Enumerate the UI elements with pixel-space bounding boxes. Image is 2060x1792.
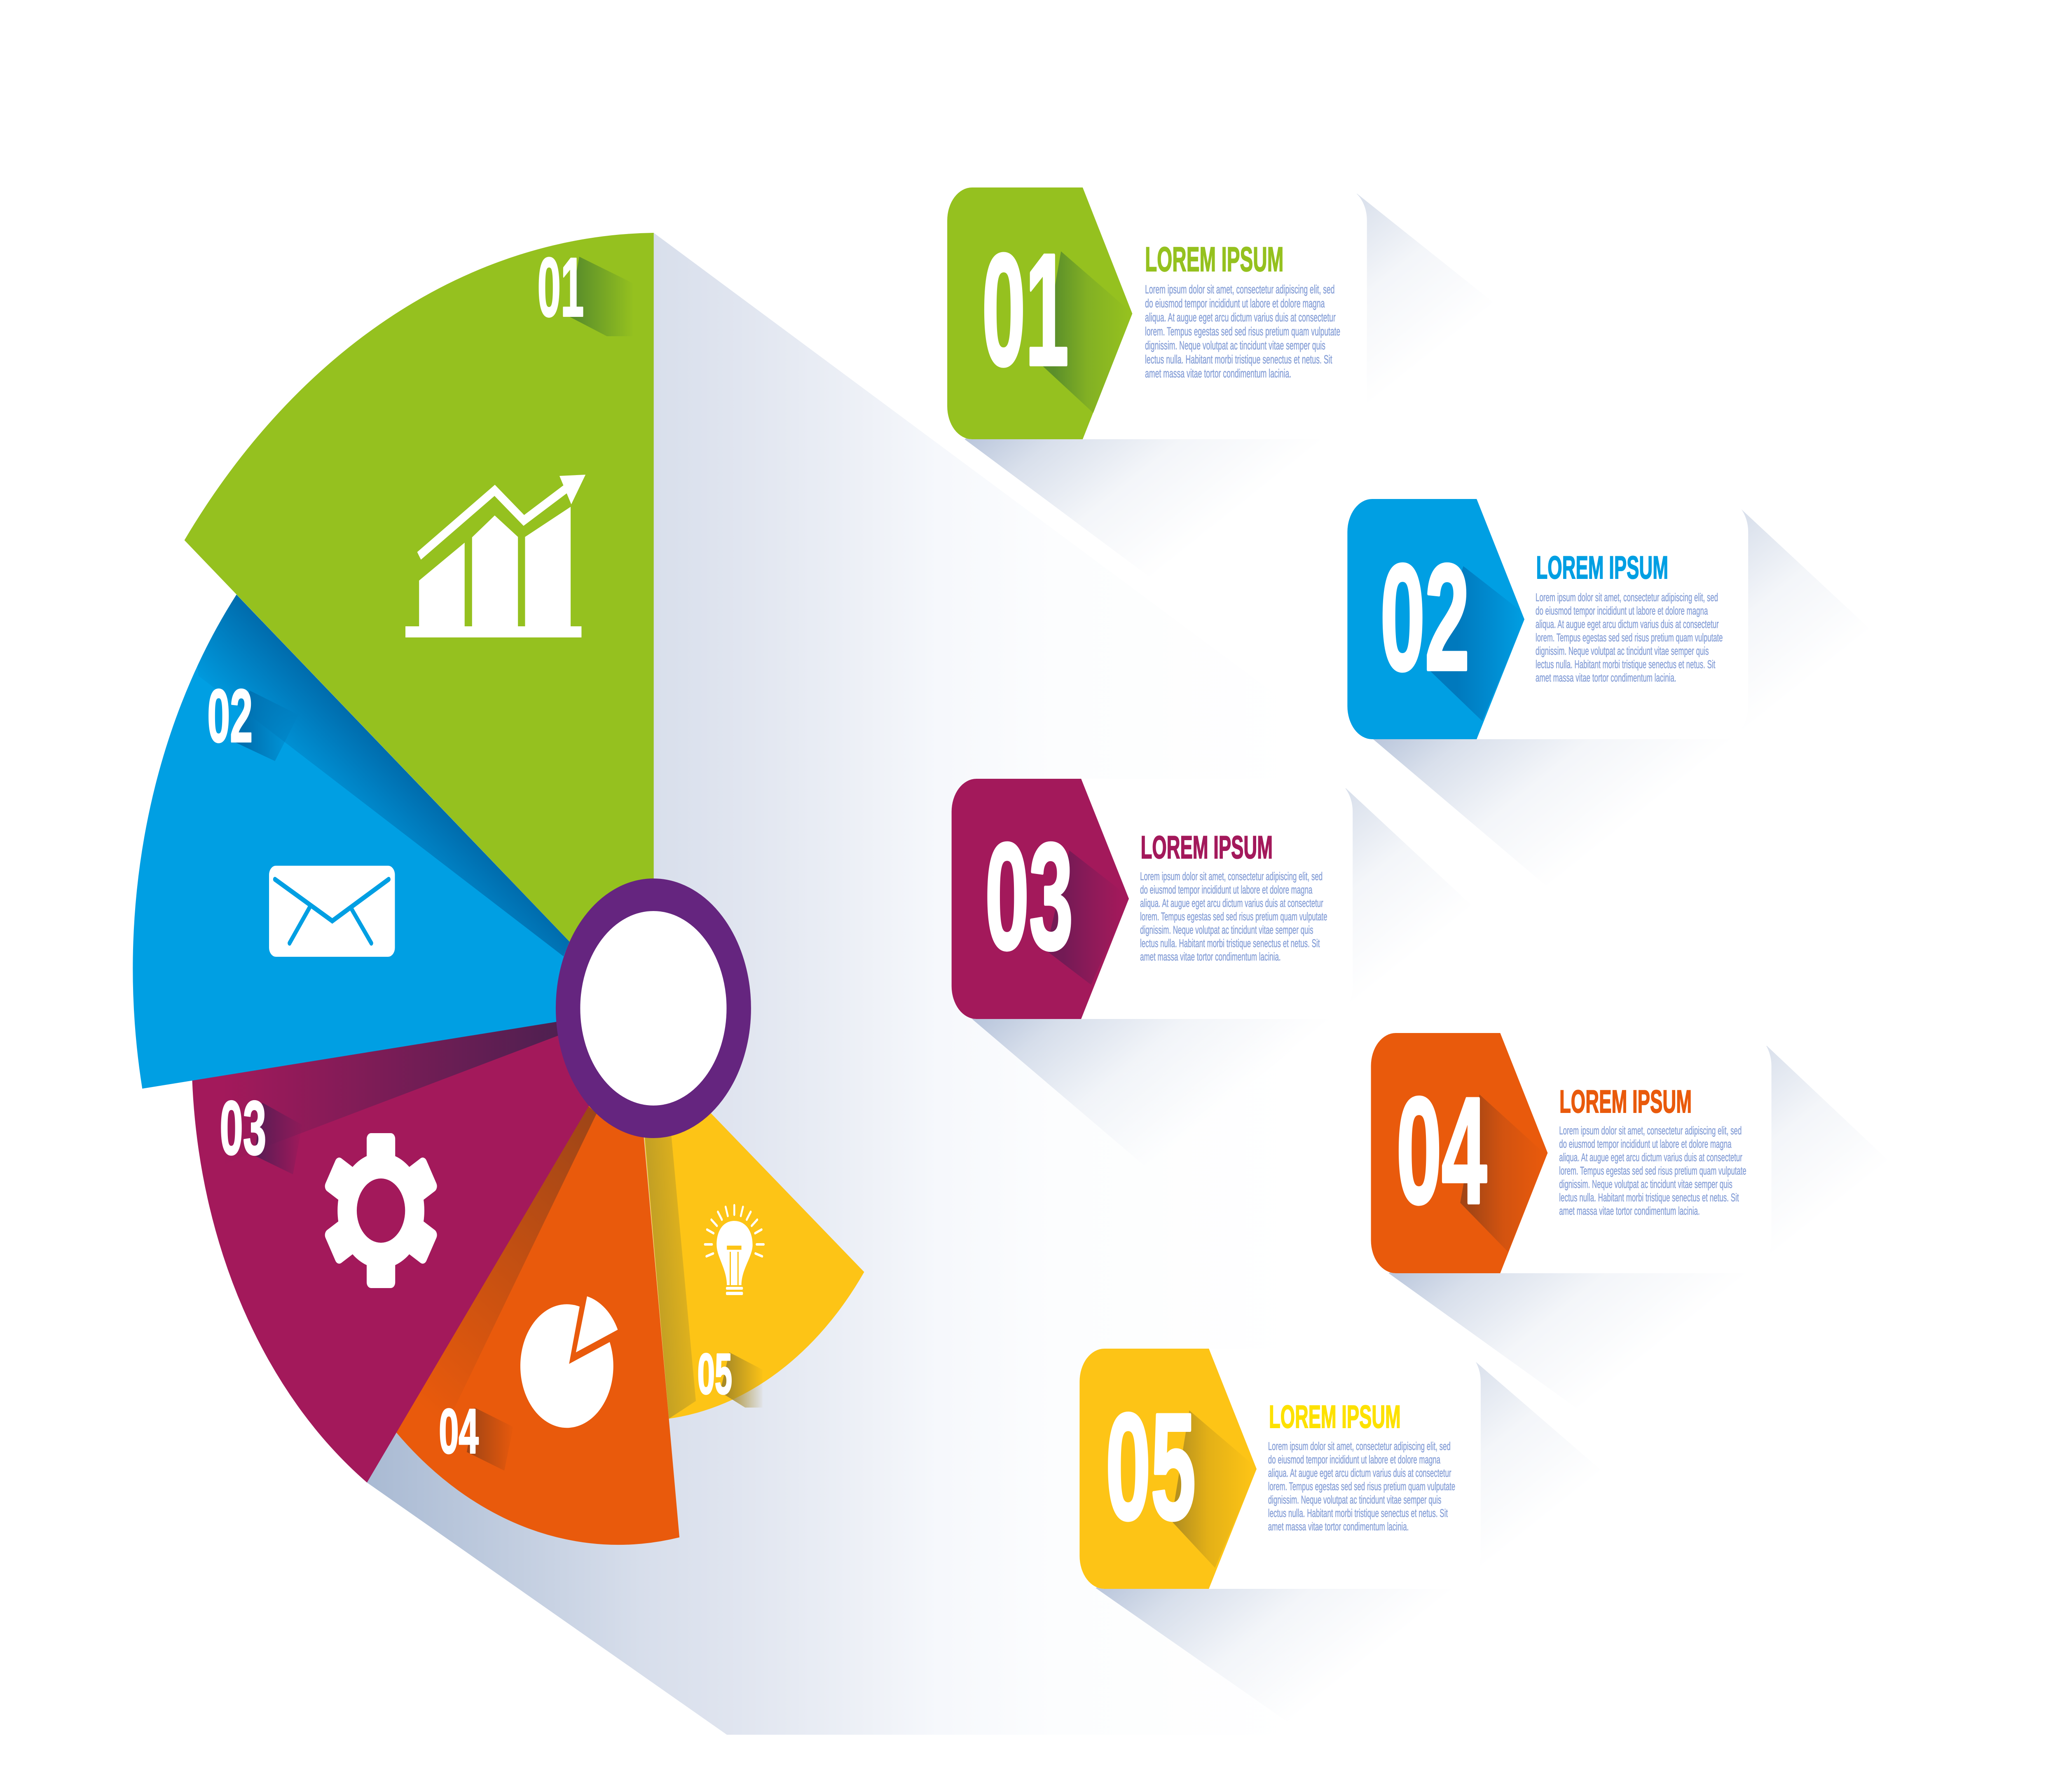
card 02 body text: lorem. Tempus egestas sed sed risus pretium quam vulputate bbox=[1536, 631, 1723, 644]
card 02 body text: lectus nulla. Habitant morbi tristique senectus et netus. Sit bbox=[1536, 658, 1716, 671]
card 05 arrow tab bbox=[1079, 1349, 1257, 1589]
number 03 shadow bbox=[254, 1103, 302, 1174]
card 01 heading: LOREM IPSUM bbox=[1145, 240, 1283, 279]
card 04 number: 04 bbox=[1396, 1066, 1487, 1235]
card 03 arrow tab bbox=[952, 779, 1129, 1019]
card 05 body text: aliqua. At augue eget arcu dictum varius duis at consectetur bbox=[1268, 1466, 1451, 1479]
card 02 body text: dignissim. Neque volutpat ac tincidunt vitae semper quis bbox=[1536, 644, 1709, 657]
card 05 cast shadow bbox=[1096, 1362, 1724, 1761]
card 04 body text: amet massa vitae tortor condimentum lacinia. bbox=[1559, 1204, 1700, 1217]
icon: rising bar chart bbox=[405, 475, 585, 637]
card 02 heading: LOREM IPSUM bbox=[1536, 549, 1668, 586]
card 03 number shadow bbox=[1046, 850, 1129, 985]
card 01 body text: lectus nulla. Habitant morbi tristique senectus et netus. Sit bbox=[1145, 353, 1332, 366]
card 02 body text: do eiusmod tempor incididunt ut labore et dolore magna bbox=[1536, 604, 1708, 617]
card 05 body text: do eiusmod tempor incididunt ut labore et dolore magna bbox=[1268, 1453, 1441, 1466]
wedge 05 yellow bbox=[639, 1071, 864, 1419]
card 03 body text: amet massa vitae tortor condimentum lacinia. bbox=[1140, 950, 1281, 963]
card 05 body text: dignissim. Neque volutpat ac tincidunt vitae semper quis bbox=[1268, 1493, 1441, 1506]
wedge 02 blue bbox=[133, 595, 569, 1089]
card 04 body text bbox=[1559, 1124, 1746, 1217]
number 05 shadow bbox=[720, 1352, 763, 1408]
card 05 body text: lorem. Tempus egestas sed sed risus pretium quam vulputate bbox=[1268, 1480, 1455, 1492]
card 02 white panel bbox=[1347, 499, 1748, 739]
card 02 body text bbox=[1536, 591, 1723, 684]
card 04 arrow tab bbox=[1371, 1033, 1547, 1273]
card 02 body text: amet massa vitae tortor condimentum lacinia. bbox=[1536, 671, 1676, 684]
card 01 body text: amet massa vitae tortor condimentum lacinia. bbox=[1145, 367, 1291, 380]
card 01 body text: Lorem ipsum dolor sit amet, consectetur adipiscing elit, sed bbox=[1145, 283, 1335, 296]
number 02: 02 bbox=[207, 674, 253, 758]
card 01 body text: dignissim. Neque volutpat ac tincidunt vitae semper quis bbox=[1145, 339, 1325, 352]
card 04 cast shadow bbox=[1388, 1046, 2015, 1451]
long cast shadow of the wheel bbox=[367, 233, 1488, 1735]
card 03 heading: LOREM IPSUM bbox=[1141, 829, 1273, 865]
card 03 body text: lorem. Tempus egestas sed sed risus pretium quam vulputate bbox=[1140, 910, 1327, 923]
card 04 heading: LOREM IPSUM bbox=[1559, 1083, 1692, 1120]
card 02 body text: Lorem ipsum dolor sit amet, consectetur adipiscing elit, sed bbox=[1536, 591, 1718, 604]
card 03 cast shadow bbox=[972, 788, 1594, 1230]
card 04 white panel bbox=[1371, 1033, 1772, 1273]
card 03 body text: do eiusmod tempor incididunt ut labore et dolore magna bbox=[1140, 883, 1313, 896]
card 01 body text: aliqua. At augue eget arcu dictum varius duis at consectetur bbox=[1145, 311, 1336, 324]
card 04 body text: dignissim. Neque volutpat ac tincidunt vitae semper quis bbox=[1559, 1178, 1732, 1190]
card 01 cast shadow bbox=[964, 194, 1605, 624]
card 02 body text: aliqua. At augue eget arcu dictum varius duis at consectetur bbox=[1536, 618, 1719, 630]
card 02 bbox=[1347, 499, 1748, 739]
card 01 white panel bbox=[947, 187, 1367, 439]
card 01 body text: do eiusmod tempor incididunt ut labore et dolore magna bbox=[1145, 297, 1325, 310]
card 04 body text: Lorem ipsum dolor sit amet, consectetur adipiscing elit, sed bbox=[1559, 1124, 1742, 1137]
infographic canvas bbox=[133, 187, 1843, 1735]
card 02 number: 02 bbox=[1380, 533, 1470, 702]
card 03 body text: Lorem ipsum dolor sit amet, consectetur adipiscing elit, sed bbox=[1140, 870, 1323, 883]
card 01 body text: lorem. Tempus egestas sed sed risus pretium quam vulputate bbox=[1145, 325, 1340, 338]
number 04: 04 bbox=[439, 1396, 479, 1466]
card 01 arrow tab bbox=[947, 187, 1132, 439]
number 04 shadow bbox=[467, 1408, 513, 1471]
card 03 white panel bbox=[952, 779, 1353, 1019]
card 01 number: 01 bbox=[982, 221, 1069, 398]
centre ring bbox=[568, 895, 739, 1122]
card 01 bbox=[947, 187, 1367, 439]
card 03 body text: lectus nulla. Habitant morbi tristique senectus et netus. Sit bbox=[1140, 937, 1320, 949]
card 05 white panel bbox=[1079, 1349, 1481, 1589]
card 05 body text: Lorem ipsum dolor sit amet, consectetur adipiscing elit, sed bbox=[1268, 1440, 1451, 1452]
wedge 03 magenta bbox=[192, 1014, 604, 1483]
card 03 bbox=[952, 779, 1353, 1019]
card 05 heading: LOREM IPSUM bbox=[1269, 1398, 1401, 1435]
card 05 number shadow bbox=[1171, 1410, 1257, 1568]
icon: pie chart bbox=[520, 1296, 618, 1428]
card 02 arrow tab bbox=[1347, 499, 1524, 739]
icon: light bulb bbox=[705, 1205, 764, 1295]
card 04 body text: lectus nulla. Habitant morbi tristique senectus et netus. Sit bbox=[1559, 1191, 1739, 1204]
card 04 number shadow bbox=[1460, 1094, 1547, 1252]
number 02 shadow bbox=[232, 691, 298, 761]
number 01: 01 bbox=[538, 241, 584, 334]
card 02 cast shadow bbox=[1373, 509, 1989, 949]
pie wheel bbox=[133, 233, 864, 1545]
card 05 bbox=[1079, 1349, 1481, 1589]
card 05 number: 05 bbox=[1106, 1382, 1196, 1551]
card 04 bbox=[1371, 1033, 1772, 1273]
wedge 04 orange bbox=[396, 1104, 679, 1545]
icon: envelope bbox=[269, 866, 395, 957]
number 01 shadow bbox=[568, 257, 633, 336]
icon: gear bbox=[323, 1133, 438, 1288]
card 04 body text: aliqua. At augue eget arcu dictum varius duis at consectetur bbox=[1559, 1151, 1742, 1164]
card 01 number shadow bbox=[1041, 251, 1132, 413]
card 04 body text: lorem. Tempus egestas sed sed risus pretium quam vulputate bbox=[1559, 1164, 1746, 1177]
card 05 body text bbox=[1268, 1440, 1455, 1533]
number 03: 03 bbox=[220, 1086, 266, 1171]
card 03 body text bbox=[1140, 870, 1327, 963]
wedge 01 green bbox=[185, 233, 654, 1029]
card 03 body text: dignissim. Neque volutpat ac tincidunt vitae semper quis bbox=[1140, 923, 1313, 936]
card 03 body text: aliqua. At augue eget arcu dictum varius duis at consectetur bbox=[1140, 897, 1323, 909]
card 02 number shadow bbox=[1430, 566, 1524, 721]
card 05 body text: lectus nulla. Habitant morbi tristique senectus et netus. Sit bbox=[1268, 1506, 1448, 1520]
number 05: 05 bbox=[698, 1342, 732, 1406]
card 03 number: 03 bbox=[985, 812, 1073, 981]
card 01 body text bbox=[1145, 283, 1340, 380]
card 04 body text: do eiusmod tempor incididunt ut labore et dolore magna bbox=[1559, 1137, 1732, 1150]
card 05 body text: amet massa vitae tortor condimentum lacinia. bbox=[1268, 1520, 1409, 1533]
